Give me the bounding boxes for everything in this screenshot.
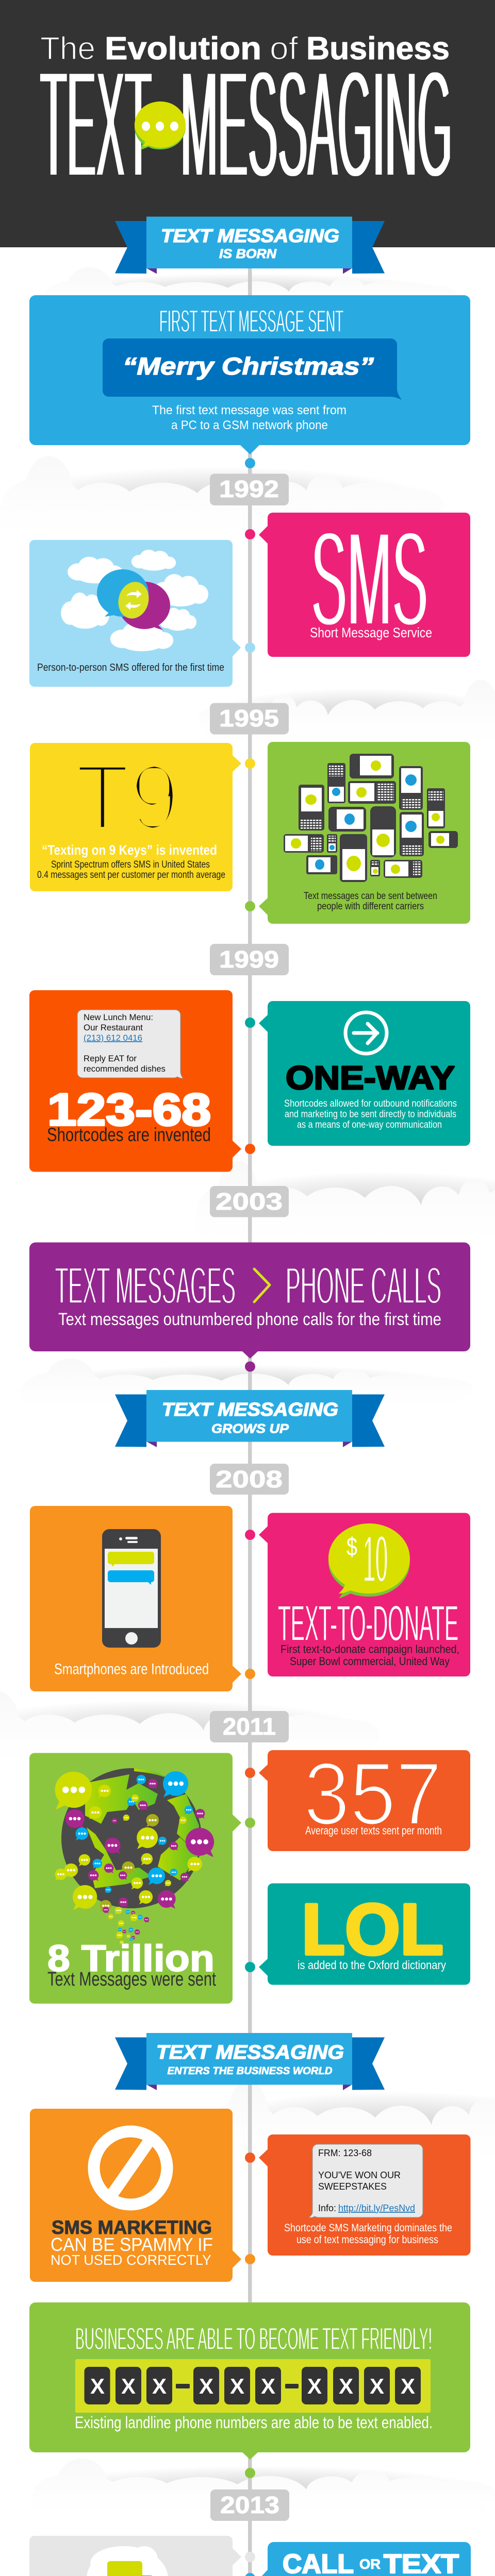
phone number placeholder bar: X bbox=[230, 2374, 244, 2398]
icon: lime chat bubble bbox=[135, 101, 186, 149]
panel: smartphones: Smartphones are Introduced bbox=[54, 1661, 209, 1677]
timeline dot bbox=[245, 1768, 255, 1778]
year 2011: 2011 bbox=[223, 1713, 276, 1740]
timeline dot bbox=[245, 2153, 255, 2163]
title: The Evolution of Business: of bbox=[270, 31, 299, 66]
phone number placeholder bar: X bbox=[401, 2374, 415, 2398]
illustration: clouds and bubbles bbox=[61, 550, 208, 651]
panel: two-way conversation bbox=[29, 2536, 241, 2576]
timeline dot bbox=[245, 758, 255, 769]
SMS bubble: lunch menu: New Lunch Menu: bbox=[84, 1012, 153, 1022]
panel: text-to-donate bbox=[259, 1513, 470, 1676]
big T9: T9 bbox=[75, 744, 179, 850]
panel: text-to-donate: First text-to-donate campaign launched, bbox=[280, 1642, 459, 1656]
panel: shortcodes: Shortcodes are invented bbox=[47, 1124, 211, 1145]
timeline dot bbox=[245, 1361, 255, 1371]
ribbon: text messaging is born bbox=[115, 216, 385, 274]
timeline dot bbox=[245, 642, 255, 653]
phone number placeholder bar bbox=[75, 2359, 431, 2413]
phone number placeholder bar: X bbox=[121, 2374, 136, 2398]
panel: 357: Average user texts sent per month bbox=[305, 1824, 442, 1837]
panel: 8 trillion: 8 Trillion bbox=[47, 1938, 214, 1979]
timeline dot bbox=[245, 1669, 255, 1679]
panel: shortcodes: 123-68 bbox=[47, 1084, 211, 1135]
timeline dot bbox=[245, 1018, 255, 1028]
illustration: cluster of phones bbox=[284, 754, 458, 882]
SMS bubble: lunch menu: Reply EAT for bbox=[84, 1054, 137, 1063]
timeline dot bbox=[245, 1144, 255, 1154]
description text: The first text message was sent from bbox=[152, 403, 346, 417]
title: The Evolution of Business: Business bbox=[306, 31, 450, 66]
ribbon: text messaging grows up: TEXT MESSAGING bbox=[162, 1399, 338, 1420]
panel: call or text: OR bbox=[359, 2556, 381, 2572]
timeline dot bbox=[245, 458, 255, 468]
timeline dot bbox=[245, 529, 255, 539]
year 2008: 2008 bbox=[216, 1466, 283, 1493]
SMS bubble: sweepstakes: SWEEPSTAKES bbox=[318, 2181, 387, 2192]
icon: smartphone bbox=[102, 1529, 161, 1648]
panel: SMS marketing spam: NOT USED CORRECTLY bbox=[51, 2252, 211, 2268]
timeline dot bbox=[245, 2573, 255, 2576]
ribbon: text messaging grows up: GROWS UP bbox=[211, 1422, 289, 1436]
phone number placeholder bar: X bbox=[152, 2374, 167, 2398]
panel: T9: 0.4 messages sent per customer per month average bbox=[37, 870, 225, 880]
title: The Evolution of Business bbox=[40, 31, 450, 66]
top header background bbox=[0, 0, 495, 247]
year 2003 bbox=[210, 1186, 289, 1217]
timeline vertical line bbox=[248, 268, 252, 2576]
timeline dot bbox=[245, 2552, 255, 2562]
panel: shortcode marketing: Shortcode SMS Marketing dominates the bbox=[284, 2222, 452, 2234]
icon: prohibition sign bbox=[94, 2131, 167, 2205]
panel: LOL: LOL bbox=[302, 1889, 443, 1970]
year 1992 bbox=[210, 474, 289, 505]
panel: text-to-donate: Super Bowl commercial, United Way bbox=[290, 1655, 450, 1668]
SMS bubble: lunch menu bbox=[77, 1010, 183, 1078]
panel: SMS marketing spam: SMS MARKETING bbox=[52, 2217, 212, 2238]
panel: shortcode marketing: use of text messaging for business bbox=[296, 2234, 438, 2246]
panel: smartphones bbox=[30, 1506, 241, 1691]
ribbon: text messaging is born: TEXT MESSAGING bbox=[161, 225, 339, 246]
year 1995 bbox=[210, 703, 289, 735]
panel: 357: 357 bbox=[304, 1744, 442, 1843]
ribbon: text messaging enters the business world bbox=[115, 2033, 385, 2090]
panel: text messages > phone calls: Text messages outnumbered phone calls for the first time bbox=[58, 1310, 441, 1329]
phone number placeholder bar: X bbox=[199, 2374, 213, 2398]
bubble: $10: $ bbox=[346, 1532, 357, 1561]
panel: 357 bbox=[259, 1744, 470, 1851]
panel: T9: “Texting on 9 Keys” is invented bbox=[42, 842, 217, 858]
panel: shortcodes bbox=[29, 990, 241, 1172]
year 1999: 1999 bbox=[219, 946, 279, 973]
message bubble: Merry Christmas bbox=[103, 338, 402, 400]
SMS bubble: lunch menu: (213) 612 0416 bbox=[84, 1033, 142, 1043]
panel: LOL bbox=[259, 1884, 470, 1985]
year 1992: 1992 bbox=[219, 476, 279, 502]
timeline dot bbox=[245, 1818, 255, 1828]
panel: one-way: Shortcodes allowed for outbound notifications bbox=[284, 1098, 457, 1109]
panel: text messages > phone calls bbox=[29, 1243, 470, 1359]
panel: 8 trillion bbox=[29, 1753, 241, 2004]
year 1995: 1995 bbox=[219, 705, 279, 732]
panel: shortcode marketing bbox=[259, 2134, 470, 2256]
description text bbox=[152, 403, 346, 432]
phone number placeholder bar: X bbox=[370, 2374, 384, 2398]
title: The Evolution of Business: The bbox=[40, 31, 95, 66]
year 2013 bbox=[210, 2489, 289, 2521]
bubble: $10: 10 bbox=[363, 1522, 388, 1596]
SMS bubble: sweepstakes: YOU'VE WON OUR bbox=[318, 2170, 401, 2180]
description text: a PC to a GSM network phone bbox=[171, 418, 328, 432]
phone number placeholder bar: X bbox=[90, 2374, 105, 2398]
SMS bubble: lunch menu: Our Restaurant bbox=[84, 1023, 143, 1032]
panel: one-way: and marketing to be sent directly to individuals bbox=[285, 1109, 456, 1120]
SMS bubble: sweepstakes: FRM: 123-68 bbox=[318, 2148, 372, 2158]
SMS bubble: lunch menu: recommended dishes bbox=[84, 1064, 166, 1074]
ribbon: text messaging is born: IS BORN bbox=[219, 247, 277, 261]
year 2011 bbox=[210, 1711, 289, 1742]
ribbon: text messaging enters the business world: ENTERS THE BUSINESS WORLD bbox=[167, 2065, 332, 2077]
phone number placeholder bar: X bbox=[261, 2374, 275, 2398]
panel: one-way: ONE-WAY bbox=[286, 1059, 455, 1096]
SMS bubble: sweepstakes: Info: bbox=[318, 2203, 336, 2213]
illustration: shop and customer conversation bbox=[80, 2546, 181, 2576]
SMS bubble: sweepstakes bbox=[309, 2144, 423, 2217]
panel: text friendly businesses bbox=[29, 2302, 470, 2460]
panel: one-way bbox=[259, 1001, 470, 1146]
panel: T9: Sprint Spectrum offers SMS in United States bbox=[51, 859, 210, 870]
timeline dot bbox=[245, 1530, 255, 1540]
panel: different carriers bbox=[259, 742, 470, 924]
ribbon: text messaging grows up bbox=[115, 1390, 385, 1447]
SMS bubble: sweepstakes: http://bit.ly/PesNvd bbox=[338, 2203, 415, 2213]
panel: SMS marketing spam bbox=[30, 2109, 241, 2282]
year 1999 bbox=[210, 944, 289, 975]
title: The Evolution of Business: Evolution bbox=[105, 31, 261, 66]
panel: call or text bbox=[259, 2542, 471, 2576]
panel: SMS bbox=[259, 503, 470, 657]
timeline dot bbox=[245, 2468, 255, 2478]
timeline dot bbox=[245, 901, 255, 911]
panel: different carriers: people with different carriers bbox=[317, 901, 424, 912]
title: TEXT MESSAGING: TEXT bbox=[40, 39, 152, 209]
panel: person to person SMS bbox=[29, 540, 241, 687]
phone number placeholder bar: X bbox=[339, 2374, 353, 2398]
ribbon: text messaging enters the business world: TEXT MESSAGING bbox=[156, 2042, 344, 2063]
year 2003: 2003 bbox=[216, 1188, 283, 1215]
year 2008 bbox=[210, 1464, 289, 1495]
icon: arrow in circle bbox=[345, 1012, 387, 1054]
illustration: globe of chat bubbles bbox=[55, 1768, 214, 1944]
panel: different carriers: Text messages can be sent between bbox=[304, 891, 437, 902]
panel: SMS: Short Message Service bbox=[310, 625, 432, 640]
greater-than sign bbox=[254, 1269, 270, 1302]
panel: one-way: as a means of one-way communication bbox=[297, 1120, 442, 1130]
panel: person to person SMS: Person-to-person SMS offered for the first time bbox=[37, 662, 224, 673]
panel: 8 trillion: Text Messages were sent bbox=[47, 1969, 216, 1990]
timeline dot bbox=[245, 2254, 255, 2264]
panel: SMS marketing spam: CAN BE SPAMMY IF bbox=[51, 2234, 213, 2255]
phone number placeholder bar: X bbox=[307, 2374, 322, 2398]
panel: T9 bbox=[30, 743, 241, 891]
message bubble: Merry Christmas: “Merry Christmas” bbox=[123, 352, 374, 380]
panel: LOL: is added to the Oxford dictionary bbox=[298, 1958, 446, 1972]
timeline dot bbox=[245, 1962, 255, 1972]
bubble: $10 bbox=[328, 1522, 410, 1598]
panel: text messages > phone calls: TEXT MESSAGES bbox=[55, 1257, 236, 1315]
year 2013: 2013 bbox=[220, 2492, 279, 2518]
panel: first text message bbox=[29, 295, 470, 454]
